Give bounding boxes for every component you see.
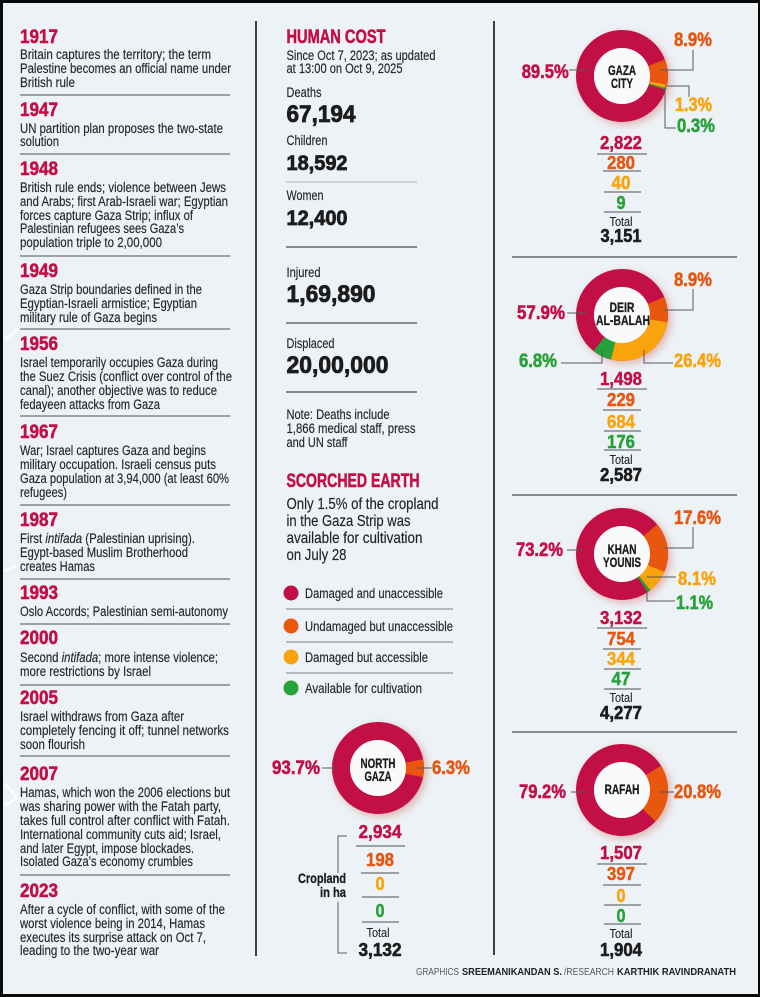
panel: timeline bbox=[19, 26, 232, 958]
text block: date note: Since Oct 7, 2023; as updated bbox=[286, 48, 436, 63]
stat: women: Women bbox=[286, 188, 324, 203]
timeline entry: 1948: 1948 bbox=[20, 158, 58, 180]
stat: children: 18,592 bbox=[286, 151, 348, 175]
figures: khan younis: 47 bbox=[612, 669, 630, 689]
figures: north gaza: 198 bbox=[366, 850, 394, 870]
timeline entry: 1947: UN partition plan proposes the two-state bbox=[20, 121, 223, 136]
percentage: 8.1: 8.1% bbox=[678, 569, 716, 590]
bracket: cropland in ha: in ha bbox=[320, 885, 346, 900]
donut label: deir al-balah bbox=[596, 300, 650, 328]
figures: gaza city: Total bbox=[610, 214, 633, 229]
figures: gaza city bbox=[597, 133, 647, 246]
percentage: 8.9: 8.9% bbox=[674, 30, 712, 51]
timeline entry: 1956: the Suez Crisis (conflict over control of the bbox=[20, 369, 232, 384]
timeline entry: 1948: forces capture Gaza Strip; influx of bbox=[20, 208, 193, 223]
stat: injured bbox=[286, 265, 376, 308]
text block: cropland intro: available for cultivation bbox=[286, 530, 422, 547]
timeline entry: 2007: 2007 bbox=[20, 763, 58, 785]
figures: rafah: 397 bbox=[607, 864, 635, 884]
figures: khan younis: 3,132 bbox=[600, 608, 642, 628]
timeline entry: 1948: British rule ends; violence between Jews bbox=[20, 180, 226, 195]
figures: khan younis bbox=[597, 608, 647, 723]
timeline entry: 2007 bbox=[19, 763, 230, 869]
timeline entry: 1956: fedayeen attacks from Gaza bbox=[20, 397, 160, 412]
stat: injured: 1,69,890 bbox=[286, 281, 376, 308]
timeline entry: 2007: Isolated Gaza’s economy crumbles bbox=[20, 854, 193, 869]
figures: gaza city: 280 bbox=[607, 153, 635, 173]
timeline entry: 1947: 1947 bbox=[20, 99, 58, 121]
figures: north gaza: 0 bbox=[376, 874, 384, 894]
stat: displaced bbox=[286, 336, 388, 379]
panel: khan younis bbox=[516, 502, 721, 723]
credits: KARTHIK RAVINDRANATH bbox=[617, 967, 736, 978]
figures: khan younis: Total bbox=[610, 690, 633, 705]
timeline entry: 1948 bbox=[20, 158, 228, 250]
text block: note: 1,866 medical staff, press bbox=[286, 421, 416, 436]
timeline entry: 1949: military rule of Gaza begins bbox=[20, 310, 157, 325]
figures: deir al-balah: Total bbox=[610, 452, 633, 467]
donut chart: rafah bbox=[571, 739, 673, 841]
stat: injured: Injured bbox=[286, 265, 320, 280]
donut label: north gaza: GAZA bbox=[364, 769, 392, 784]
panel: human cost bbox=[286, 26, 436, 450]
timeline entry: 2007: International community cuts aid; Israel, bbox=[20, 827, 221, 842]
figures: rafah: 1,507 bbox=[600, 843, 642, 863]
stat: deaths: 67,194 bbox=[286, 101, 356, 128]
figures: north gaza: 0 bbox=[376, 901, 384, 921]
panel: rafah bbox=[519, 739, 721, 960]
timeline entry: 1956: Israel temporarily occupies Gaza during bbox=[20, 355, 218, 370]
legend item: undamaged but unaccessible: Undamaged but unaccessible bbox=[305, 619, 453, 634]
timeline entry: 1993 bbox=[20, 582, 228, 619]
figures: deir al-balah: 2,587 bbox=[600, 464, 642, 485]
percentage: 0.3: 0.3% bbox=[677, 116, 715, 137]
timeline entry: 1967: military occupation. Israeli census puts bbox=[20, 457, 216, 472]
figures: khan younis: 4,277 bbox=[600, 702, 642, 723]
timeline entry: 1956: canal); another objective was to reduce bbox=[20, 383, 217, 398]
timeline entry: 1949 bbox=[20, 260, 202, 325]
figures: rafah: 0 bbox=[616, 886, 626, 906]
timeline entry: 1917 bbox=[20, 26, 231, 90]
percentage: 26.4: 26.4% bbox=[674, 351, 721, 372]
timeline entry: 1948: Palestinian refugees sees Gaza’s bbox=[20, 221, 184, 236]
timeline entry: 2007: takes full control after conflict with Fatah. bbox=[20, 813, 230, 828]
timeline entry: 1993: 1993 bbox=[20, 582, 58, 604]
timeline entry: 1967: Gaza population at 3,94,000 (at least 60% bbox=[20, 471, 229, 486]
donut chart: north gaza bbox=[335, 725, 421, 811]
percentage: 79.2: 79.2% bbox=[519, 782, 566, 803]
bracket: cropland in ha: Cropland bbox=[298, 871, 346, 886]
text block: note bbox=[286, 407, 416, 450]
timeline entry: 1917: British rule bbox=[20, 75, 75, 90]
legend item: damaged and unaccessible: Damaged and unaccessible bbox=[305, 586, 443, 601]
timeline entry: 1947 bbox=[20, 99, 223, 149]
figures: gaza city: 3,151 bbox=[600, 225, 642, 246]
panel: north gaza bbox=[272, 725, 470, 960]
figures: north gaza: 3,132 bbox=[358, 939, 402, 960]
figures: deir al-balah: 176 bbox=[607, 432, 635, 452]
timeline entry: 2005: Israel withdraws from Gaza after bbox=[20, 709, 184, 724]
legend bbox=[284, 586, 453, 696]
donut label: deir al-balah: DEIR bbox=[610, 300, 635, 315]
donut label: gaza city bbox=[608, 63, 636, 91]
timeline entry: 2005 bbox=[20, 687, 229, 752]
stat: displaced: 20,00,000 bbox=[286, 352, 388, 379]
timeline entry: 1947: solution bbox=[20, 134, 59, 149]
donut label: gaza city: GAZA bbox=[608, 63, 636, 78]
percentage: 89.5: 89.5% bbox=[522, 62, 569, 83]
percentage: 8.9: 8.9% bbox=[674, 270, 712, 291]
timeline entry: 1967: 1967 bbox=[20, 421, 58, 443]
text block: date note bbox=[286, 48, 436, 76]
text block: cropland intro: on July 28 bbox=[286, 547, 347, 564]
stat: displaced: Displaced bbox=[286, 336, 334, 351]
text block: cropland intro: in the Gaza Strip was bbox=[286, 513, 410, 530]
timeline entry: 2023: 2023 bbox=[20, 880, 58, 902]
timeline entry: 1917: Britain captures the territory; the term bbox=[20, 47, 211, 62]
percentage: 20.8: 20.8% bbox=[674, 782, 721, 803]
donut chart: khan younis bbox=[570, 502, 674, 606]
donut label: khan younis: KHAN bbox=[608, 542, 636, 557]
timeline entry: 1967: refugees) bbox=[20, 485, 67, 500]
credits bbox=[416, 967, 736, 978]
panel: deir al-balah bbox=[517, 266, 721, 485]
figures: rafah bbox=[597, 843, 647, 960]
percentage: 1.1: 1.1% bbox=[676, 593, 713, 614]
text block: cropland intro bbox=[286, 496, 438, 564]
timeline entry: 1949: Gaza Strip boundaries defined in the bbox=[20, 282, 202, 297]
timeline entry: 1956: 1956 bbox=[20, 333, 58, 355]
text block: cropland intro: Only 1.5% of the cropland bbox=[286, 496, 438, 513]
figures: gaza city: 9 bbox=[616, 193, 626, 213]
credits: /RESEARCH bbox=[564, 967, 614, 978]
timeline entry: 2005: 2005 bbox=[20, 687, 58, 709]
donut label: north gaza: NORTH bbox=[360, 756, 396, 771]
timeline entry: 2000 bbox=[20, 627, 218, 679]
donut label: gaza city: CITY bbox=[611, 76, 633, 91]
bracket: cropland in ha bbox=[298, 836, 347, 953]
donut label: deir al-balah: AL-BALAH bbox=[596, 313, 650, 328]
stat: deaths bbox=[286, 85, 356, 128]
figures: north gaza bbox=[356, 822, 405, 960]
legend item: damaged but accessible: Damaged but accessible bbox=[305, 650, 428, 665]
timeline entry: 2007: was sharing power with the Fatah party, bbox=[19, 799, 221, 814]
timeline entry: 2000: Second intifada; more intense violence; bbox=[20, 650, 218, 665]
timeline entry: 2023: executes its surprise attack on Oct 7, bbox=[20, 930, 206, 945]
timeline entry: 1993: Oslo Accords; Palestinian semi-autonomy bbox=[20, 604, 228, 619]
legend item: available for cultivation: Available for cultivation bbox=[305, 681, 422, 696]
timeline entry: 2007: and later Egypt, impose blockades. bbox=[20, 841, 194, 856]
heading: human cost: HUMAN COST bbox=[286, 26, 386, 48]
percentage: 57.9: 57.9% bbox=[517, 303, 565, 324]
stat: children: Children bbox=[286, 133, 328, 148]
figures: rafah: 0 bbox=[616, 906, 626, 926]
timeline entry: 1949: Egyptian-Israeli armistice; Egyptian bbox=[20, 296, 197, 311]
timeline entry: 1987: creates Hamas bbox=[20, 559, 95, 574]
figures: khan younis: 344 bbox=[607, 649, 635, 669]
timeline entry: 2005: completely fencing it off; tunnel networks bbox=[20, 723, 229, 738]
figures: north gaza: 2,934 bbox=[358, 822, 402, 842]
percentage: 6.8: 6.8% bbox=[519, 351, 557, 372]
timeline entry: 2023 bbox=[19, 880, 225, 958]
donut label: north gaza bbox=[360, 756, 396, 784]
figures: gaza city: 40 bbox=[612, 173, 630, 193]
timeline entry: 1987: 1987 bbox=[20, 509, 58, 531]
figures: north gaza: Total bbox=[366, 925, 390, 940]
stat: women bbox=[286, 188, 348, 230]
timeline entry: 1987: First intifada (Palestinian uprising). bbox=[20, 531, 195, 546]
timeline entry: 2005: soon flourish bbox=[20, 737, 85, 752]
timeline entry: 1967 bbox=[20, 421, 229, 500]
figures: khan younis: 754 bbox=[607, 629, 635, 649]
timeline entry: 2000: more restrictions by Israel bbox=[20, 664, 151, 679]
percentage: 6.3: 6.3% bbox=[432, 758, 470, 779]
timeline entry: 1949: 1949 bbox=[20, 260, 58, 282]
donut chart: gaza city bbox=[574, 28, 670, 124]
timeline entry: 2007: Hamas, which won the 2006 elections but bbox=[20, 785, 230, 800]
figures: deir al-balah bbox=[597, 369, 647, 485]
timeline entry: 2000: 2000 bbox=[20, 627, 58, 649]
timeline entry: 1917: 1917 bbox=[20, 26, 58, 48]
donut label: rafah: RAFAH bbox=[604, 782, 640, 797]
timeline entry: 1967: War; Israel captures Gaza and begins bbox=[20, 443, 206, 458]
percentage: 1.3: 1.3% bbox=[675, 95, 712, 116]
credits: SREEMANIKANDAN S. bbox=[462, 967, 562, 978]
timeline entry: 1987 bbox=[20, 509, 195, 574]
stat: children bbox=[286, 133, 348, 175]
timeline entry: 1956 bbox=[20, 333, 232, 412]
timeline entry: 2023: After a cycle of conflict, with some of the bbox=[20, 902, 225, 917]
figures: rafah: 1,904 bbox=[600, 939, 643, 960]
text block: note: Note: Deaths include bbox=[286, 407, 390, 422]
percentage: 73.2: 73.2% bbox=[516, 540, 563, 561]
timeline entry: 1948: and Arabs; first Arab-Israeli war; Egyptian bbox=[20, 194, 228, 209]
timeline entry: 1917: Palestine becomes an official name under bbox=[20, 61, 231, 76]
figures: deir al-balah: 684 bbox=[607, 412, 635, 432]
timeline entry: 2023: leading to the two-year war bbox=[20, 943, 159, 958]
timeline entry: 1948: population triple to 2,00,000 bbox=[20, 235, 162, 250]
percentage: 93.7: 93.7% bbox=[272, 758, 320, 779]
panel: gaza city bbox=[522, 28, 715, 246]
donut chart: deir al-balah bbox=[573, 266, 671, 364]
panel: scorched earth bbox=[284, 470, 453, 696]
figures: rafah: Total bbox=[610, 926, 633, 941]
stat: women: 12,400 bbox=[286, 206, 348, 230]
timeline entry: 2023: worst violence being in 2014, Hamas bbox=[19, 916, 205, 931]
timeline entry: 1987: Egypt-based Muslim Brotherhood bbox=[20, 545, 188, 560]
donut label: khan younis bbox=[603, 542, 641, 570]
text block: date note: at 13:00 on Oct 9, 2025 bbox=[286, 61, 402, 76]
percentage: 17.6: 17.6% bbox=[674, 508, 721, 529]
credits: GRAPHICS bbox=[416, 967, 459, 978]
figures: gaza city: 2,822 bbox=[600, 133, 642, 153]
text block: note: and UN staff bbox=[286, 435, 348, 450]
figures: deir al-balah: 1,498 bbox=[600, 369, 642, 389]
heading: scorched earth: SCORCHED EARTH bbox=[286, 470, 420, 492]
figures: deir al-balah: 229 bbox=[607, 390, 635, 410]
donut label: khan younis: YOUNIS bbox=[603, 555, 641, 570]
stat: deaths: Deaths bbox=[286, 85, 322, 100]
